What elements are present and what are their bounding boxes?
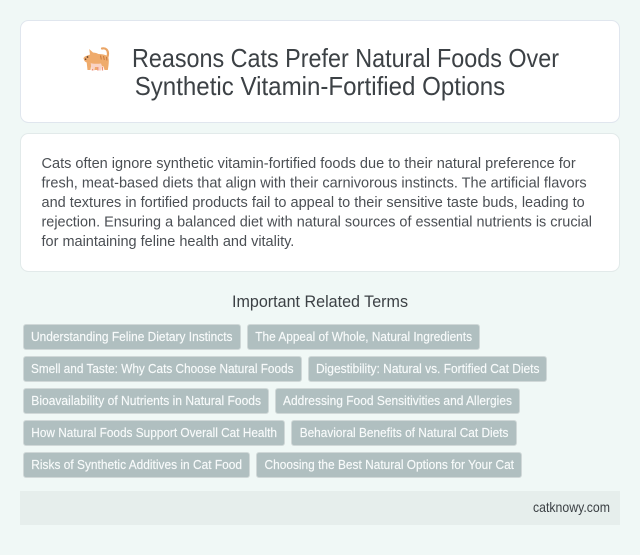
panel: description card [20, 134, 620, 272]
description paragraph [42, 155, 592, 250]
tag: Smell and Taste: Why Cats Choose Natural Foods [31, 361, 294, 376]
description paragraph: for maintaining feline health and vitality. [42, 233, 294, 250]
tag [24, 356, 302, 382]
description paragraph: fresh, meat-based diets that align with their carnivorous instincts. The artificial flavors [42, 174, 587, 192]
tag: The Appeal of Whole, Natural Ingredients [255, 329, 472, 344]
icon: orange cat [83, 48, 109, 70]
tag list [24, 324, 546, 478]
tag: Bioavailability of Nutrients in Natural Foods [31, 393, 261, 408]
tag [308, 356, 546, 382]
title line 2: Synthetic Vitamin-Fortified Options [135, 73, 505, 101]
description paragraph: Cats often ignore synthetic vitamin-fortified foods due to their natural preference for [42, 155, 576, 172]
tag: Addressing Food Sensitivities and Allergies [283, 393, 512, 408]
tag: Risks of Synthetic Additives in Cat Food [31, 457, 242, 472]
tag: Digestibility: Natural vs. Fortified Cat Diets [316, 361, 540, 376]
tag [256, 452, 522, 478]
description paragraph: rejection. Ensuring a balanced diet with natural sources of essential nutrients is crucial [42, 214, 592, 230]
tag [24, 388, 268, 414]
title line 1: Reasons Cats Prefer Natural Foods Over [132, 45, 559, 73]
footer source text: catknowy.com [533, 500, 610, 515]
description paragraph: and textures in fortified products fail to appeal to their sensitive taste buds, leading to [42, 194, 585, 211]
tag: Understanding Feline Dietary Instincts [31, 329, 232, 344]
tag [24, 324, 240, 350]
footer bar [20, 491, 620, 525]
tag [24, 420, 284, 446]
tag: Choosing the Best Natural Options for Your Cat [264, 457, 514, 472]
tag: Behavioral Benefits of Natural Cat Diets [300, 425, 508, 440]
tag: How Natural Foods Support Overall Cat Health [31, 425, 277, 440]
tag [248, 324, 480, 350]
panel: title card [20, 20, 620, 122]
tag [292, 420, 516, 446]
heading: important related terms: Important Related Terms [232, 293, 408, 311]
tag [24, 452, 250, 478]
tag [276, 388, 520, 414]
